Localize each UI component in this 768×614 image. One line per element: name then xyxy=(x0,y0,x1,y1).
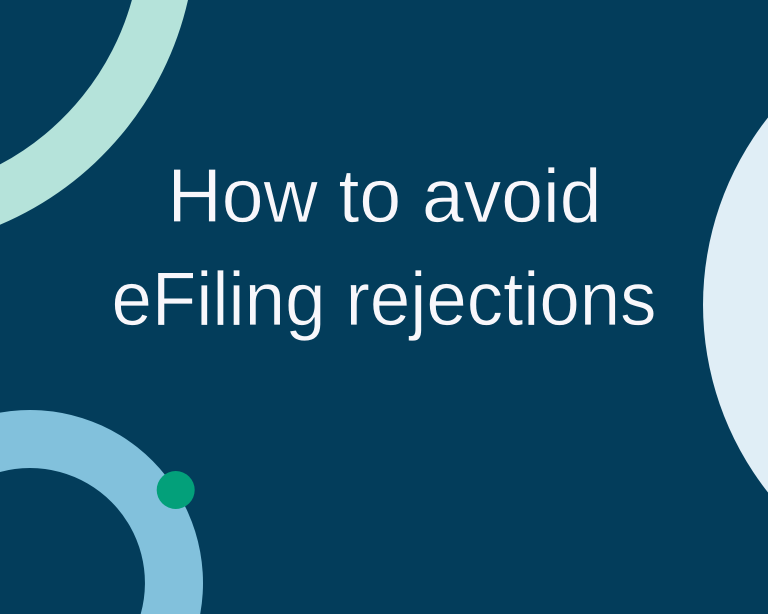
title line 1: How to avoid xyxy=(168,154,602,239)
title line 2: eFiling rejections xyxy=(112,257,656,342)
title xyxy=(112,154,656,342)
light blue ring bottom left xyxy=(0,410,203,614)
green dot xyxy=(157,471,195,509)
mint ring top left xyxy=(0,0,188,225)
pale blue circle right xyxy=(703,118,768,492)
